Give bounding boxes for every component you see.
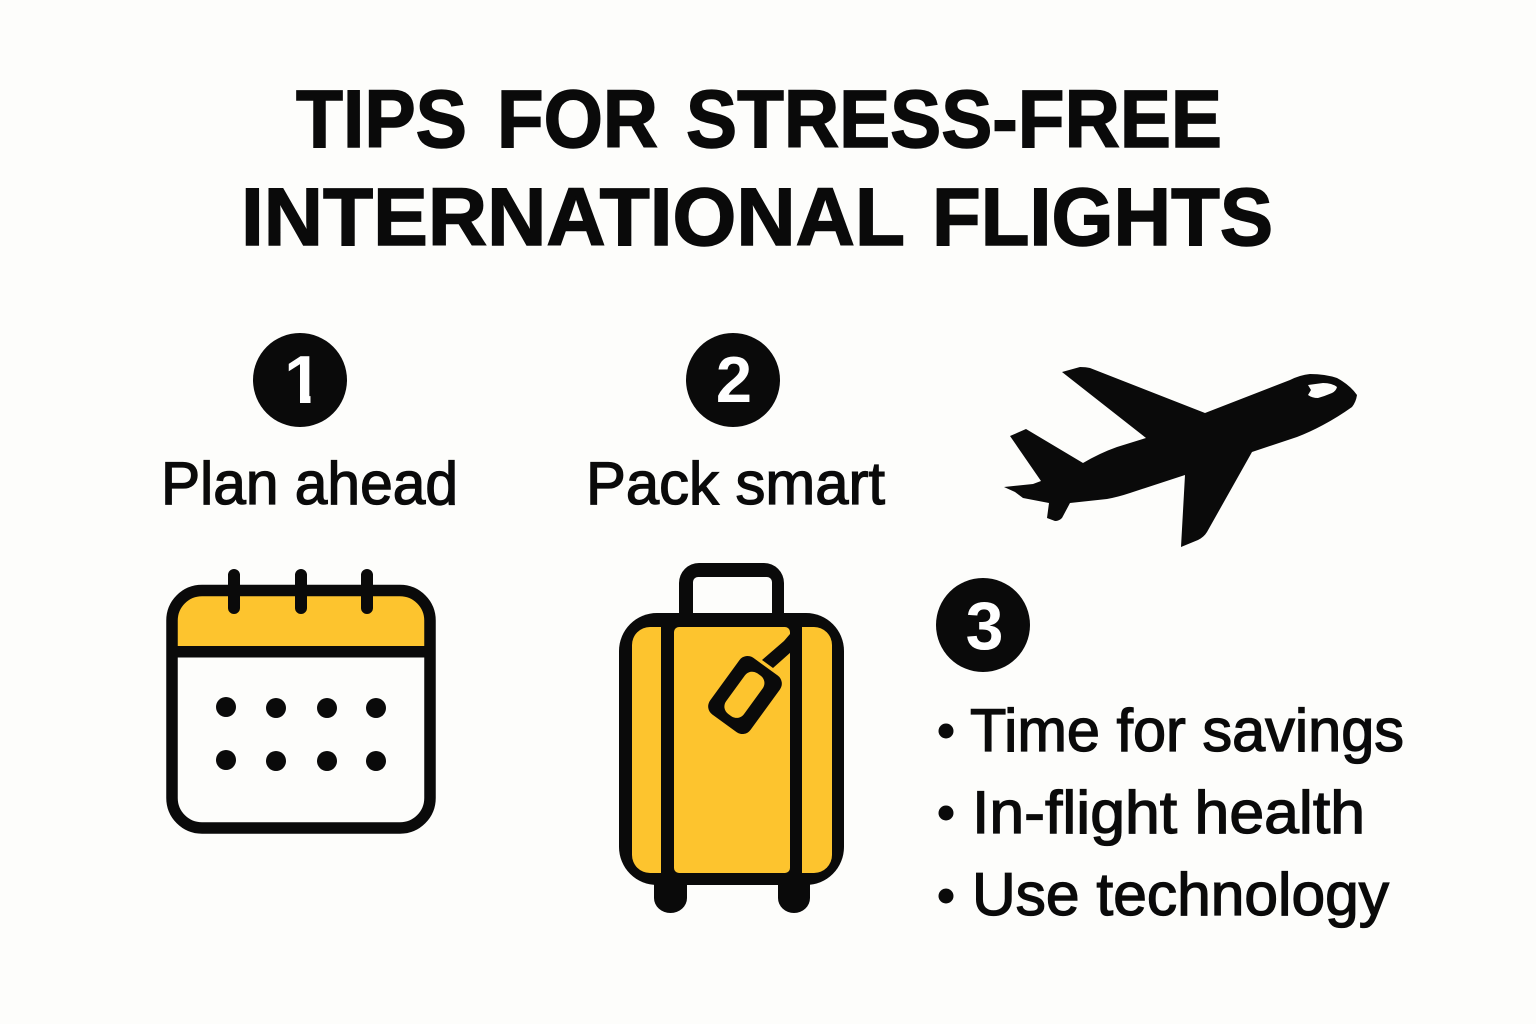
icon: calendar [172,575,430,828]
step 2 badge [686,333,780,427]
step 3 badge [936,578,1030,672]
title: FOR [497,74,658,165]
title: INTERNATIONAL [241,172,905,263]
step 3 list: Use technology [972,861,1389,928]
step 1 badge: 1 [284,342,322,418]
step 2 badge: 2 [716,343,752,416]
icon: airplane window [1308,383,1337,398]
step 1 label: Plan ahead [161,450,458,517]
step 3 list: In-flight health [972,779,1365,846]
step 3 list [938,697,1404,928]
step 3 badge: 3 [966,588,1003,664]
step 3 list: Time for savings [970,697,1404,764]
title: TIPS [296,74,467,165]
step 2 label: Pack smart [586,450,885,517]
icon: suitcase [619,563,844,913]
title [241,74,1273,263]
step 1 badge [253,333,347,427]
title: FLIGHTS [932,172,1273,263]
icon: airplane [1004,367,1357,547]
title: STRESS-FREE [686,74,1222,165]
